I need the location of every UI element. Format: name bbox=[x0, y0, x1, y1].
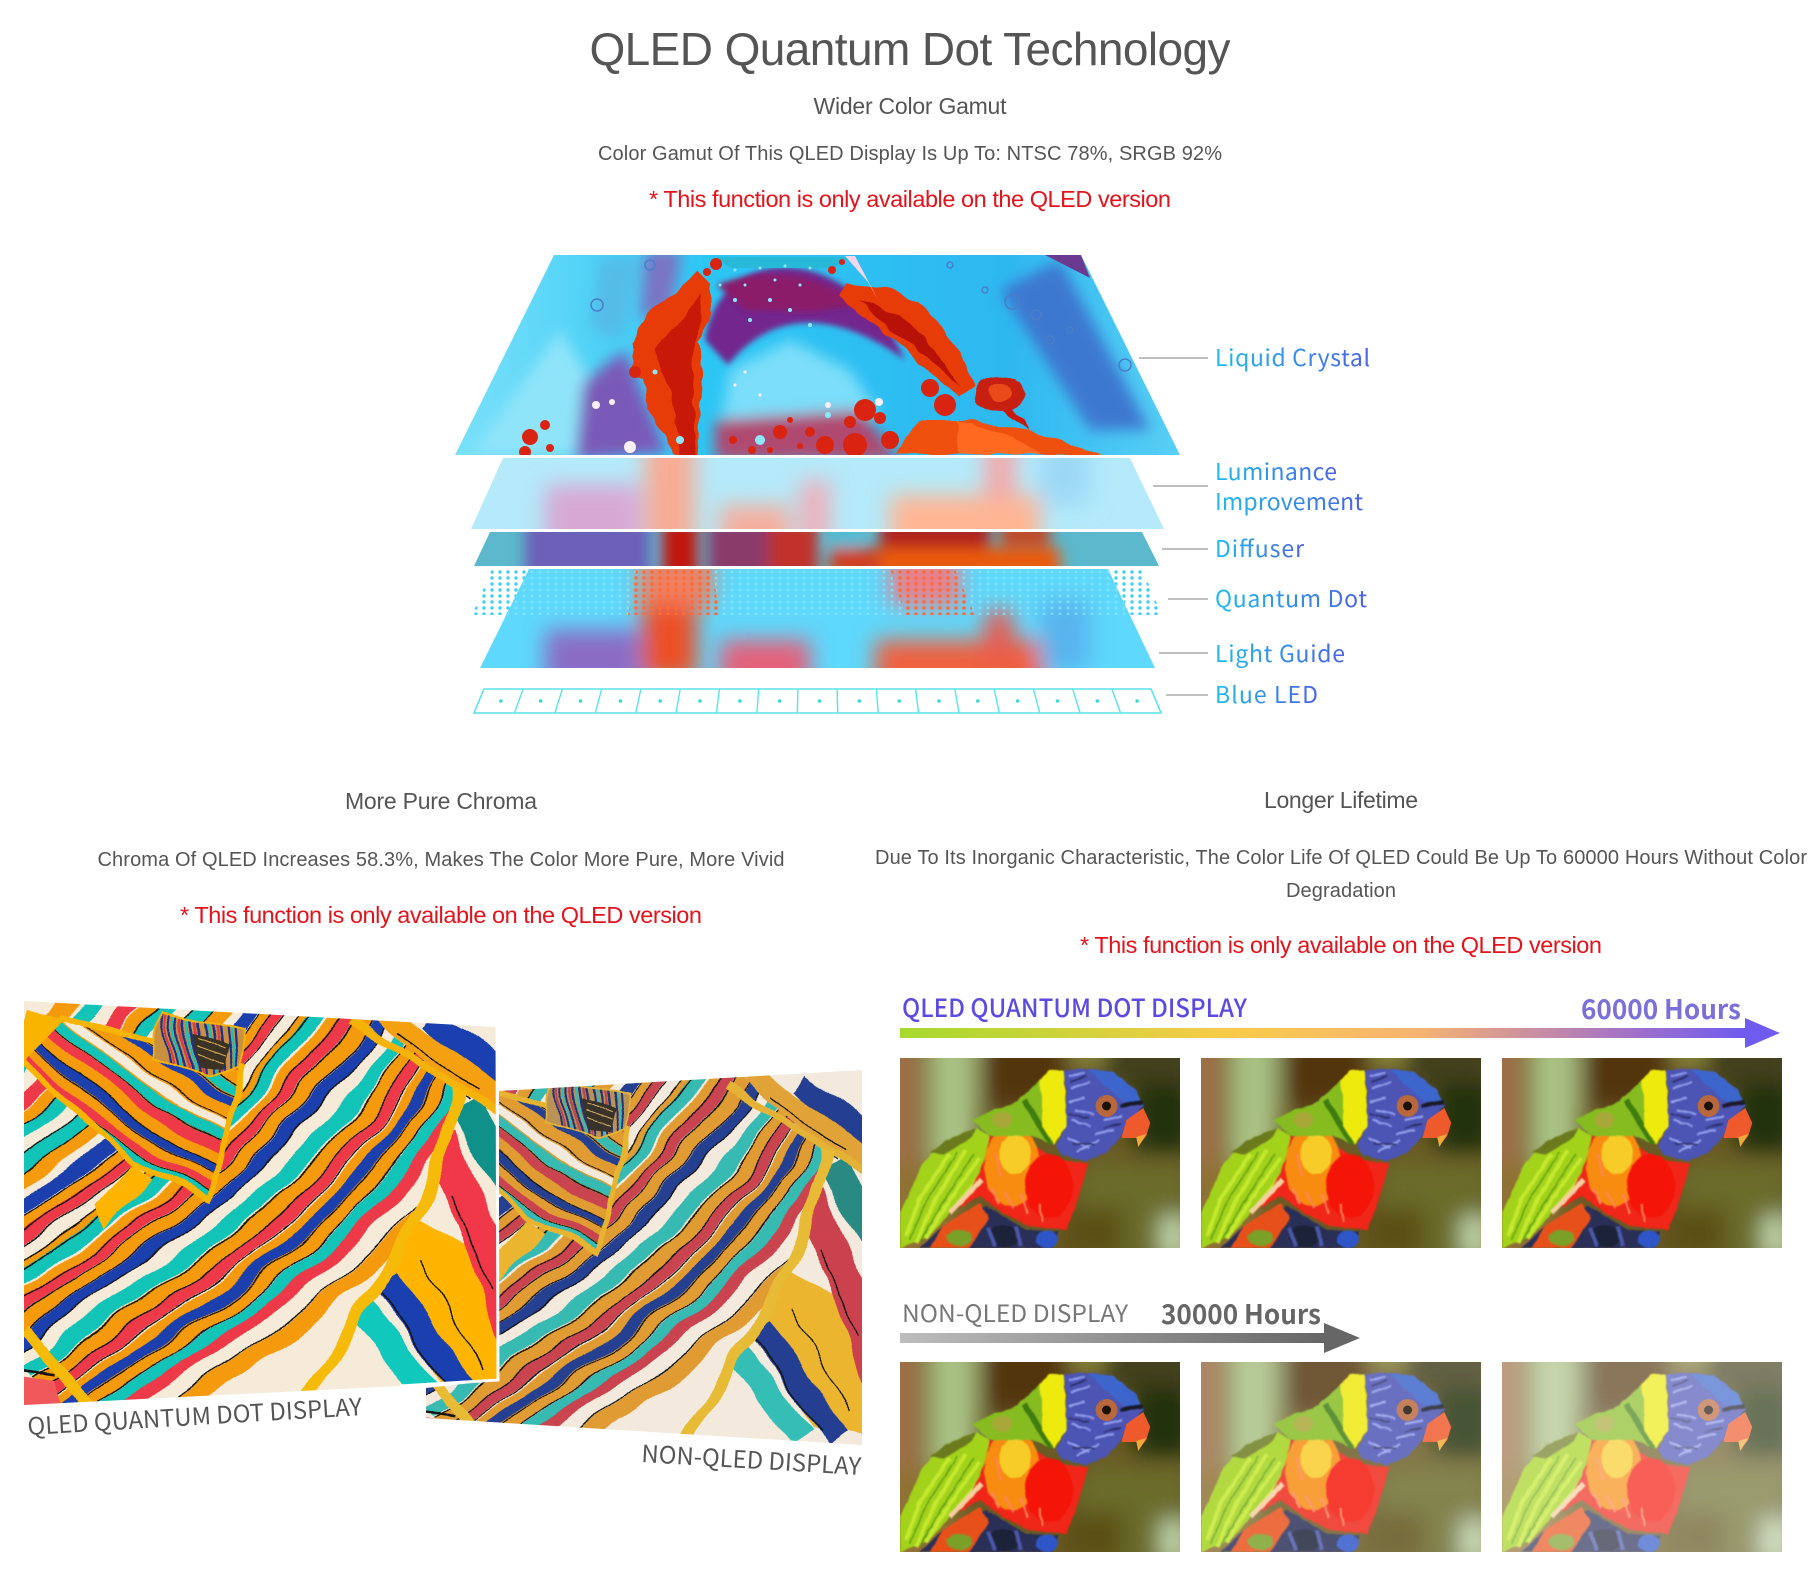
layer: diffuser bbox=[474, 532, 1159, 566]
label: non-QLED display lifetime: NON-QLED DISPLAY bbox=[902, 1294, 1128, 1329]
caption: non-QLED display: NON-QLED DISPLAY bbox=[641, 1434, 863, 1482]
label: quantum dot: Quantum Dot bbox=[1215, 580, 1367, 614]
label: liquid crystal: Liquid Crystal bbox=[1215, 339, 1370, 373]
image: QLED display swirl bbox=[24, 1001, 496, 1405]
label: diffuser: Diffuser bbox=[1215, 530, 1304, 564]
layer: blue LED grid bbox=[474, 689, 1161, 713]
description: chroma: Chroma Of QLED Increases 58.3%, Makes The Color More Pure, More Vivid bbox=[98, 849, 784, 871]
parrot image 3, QLED row bbox=[1482, 1038, 1796, 1278]
label: luminance improvement: Improvement bbox=[1215, 483, 1363, 517]
label: luminance improvement bbox=[1215, 453, 1363, 517]
arrow: non-QLED timeline bbox=[900, 1323, 1360, 1353]
layer: liquid crystal painting bbox=[440, 250, 1200, 460]
white edge of QLED image bbox=[400, 1027, 498, 1386]
label: light guide: Light Guide bbox=[1215, 635, 1345, 669]
note: QLED only, chroma: * This function is only available on the QLED version bbox=[180, 902, 702, 928]
layer: quantum dot bbox=[472, 569, 1162, 615]
image: non-QLED display swirl bbox=[426, 1070, 862, 1445]
description: color gamut: Color Gamut Of This QLED Display Is Up To: NTSC 78%, SRGB 92% bbox=[598, 143, 1222, 165]
layer stack diagram bbox=[440, 250, 1200, 713]
parrot image 2, non-QLED row, faded bbox=[1181, 1342, 1495, 1576]
title: QLED Quantum Dot Technology bbox=[590, 23, 1230, 75]
parrot image 3, non-QLED row, most faded bbox=[1482, 1342, 1796, 1576]
label: QLED quantum dot display lifetime: QLED QUANTUM DOT DISPLAY bbox=[902, 989, 1247, 1025]
arrow: QLED timeline bbox=[900, 1018, 1780, 1048]
parrot image 2, QLED row bbox=[1181, 1038, 1495, 1278]
parrot image 1, QLED row bbox=[880, 1038, 1194, 1278]
parrot image 1, non-QLED row bbox=[880, 1342, 1194, 1576]
label: blue LED: Blue LED bbox=[1215, 676, 1318, 710]
layer: light guide bbox=[480, 569, 1155, 668]
caption: QLED quantum dot display: QLED QUANTUM DOT DISPLAY bbox=[26, 1387, 363, 1442]
subtitle: wider color gamut: Wider Color Gamut bbox=[814, 93, 1007, 119]
description: lifetime: Due To Its Inorganic Characteristic, The Color Life Of QLED Could Be Up To 60000 Hours Without Color bbox=[875, 847, 1807, 869]
description: lifetime bbox=[875, 847, 1807, 902]
label: luminance improvement: Luminance bbox=[1215, 453, 1337, 487]
heading: more pure chroma: More Pure Chroma bbox=[345, 788, 537, 814]
heading: longer lifetime: Longer Lifetime bbox=[1264, 787, 1418, 813]
label: 30000 hours: 30000 Hours bbox=[1161, 1293, 1321, 1332]
note: QLED only: * This function is only available on the QLED version bbox=[649, 186, 1171, 212]
label: 60000 hours: 60000 Hours bbox=[1581, 988, 1741, 1027]
layer: luminance improvement bbox=[471, 458, 1164, 529]
note: QLED only, lifetime: * This function is only available on the QLED version bbox=[1080, 932, 1602, 958]
leader lines bbox=[1139, 358, 1208, 695]
description: lifetime: Degradation bbox=[1286, 880, 1396, 902]
